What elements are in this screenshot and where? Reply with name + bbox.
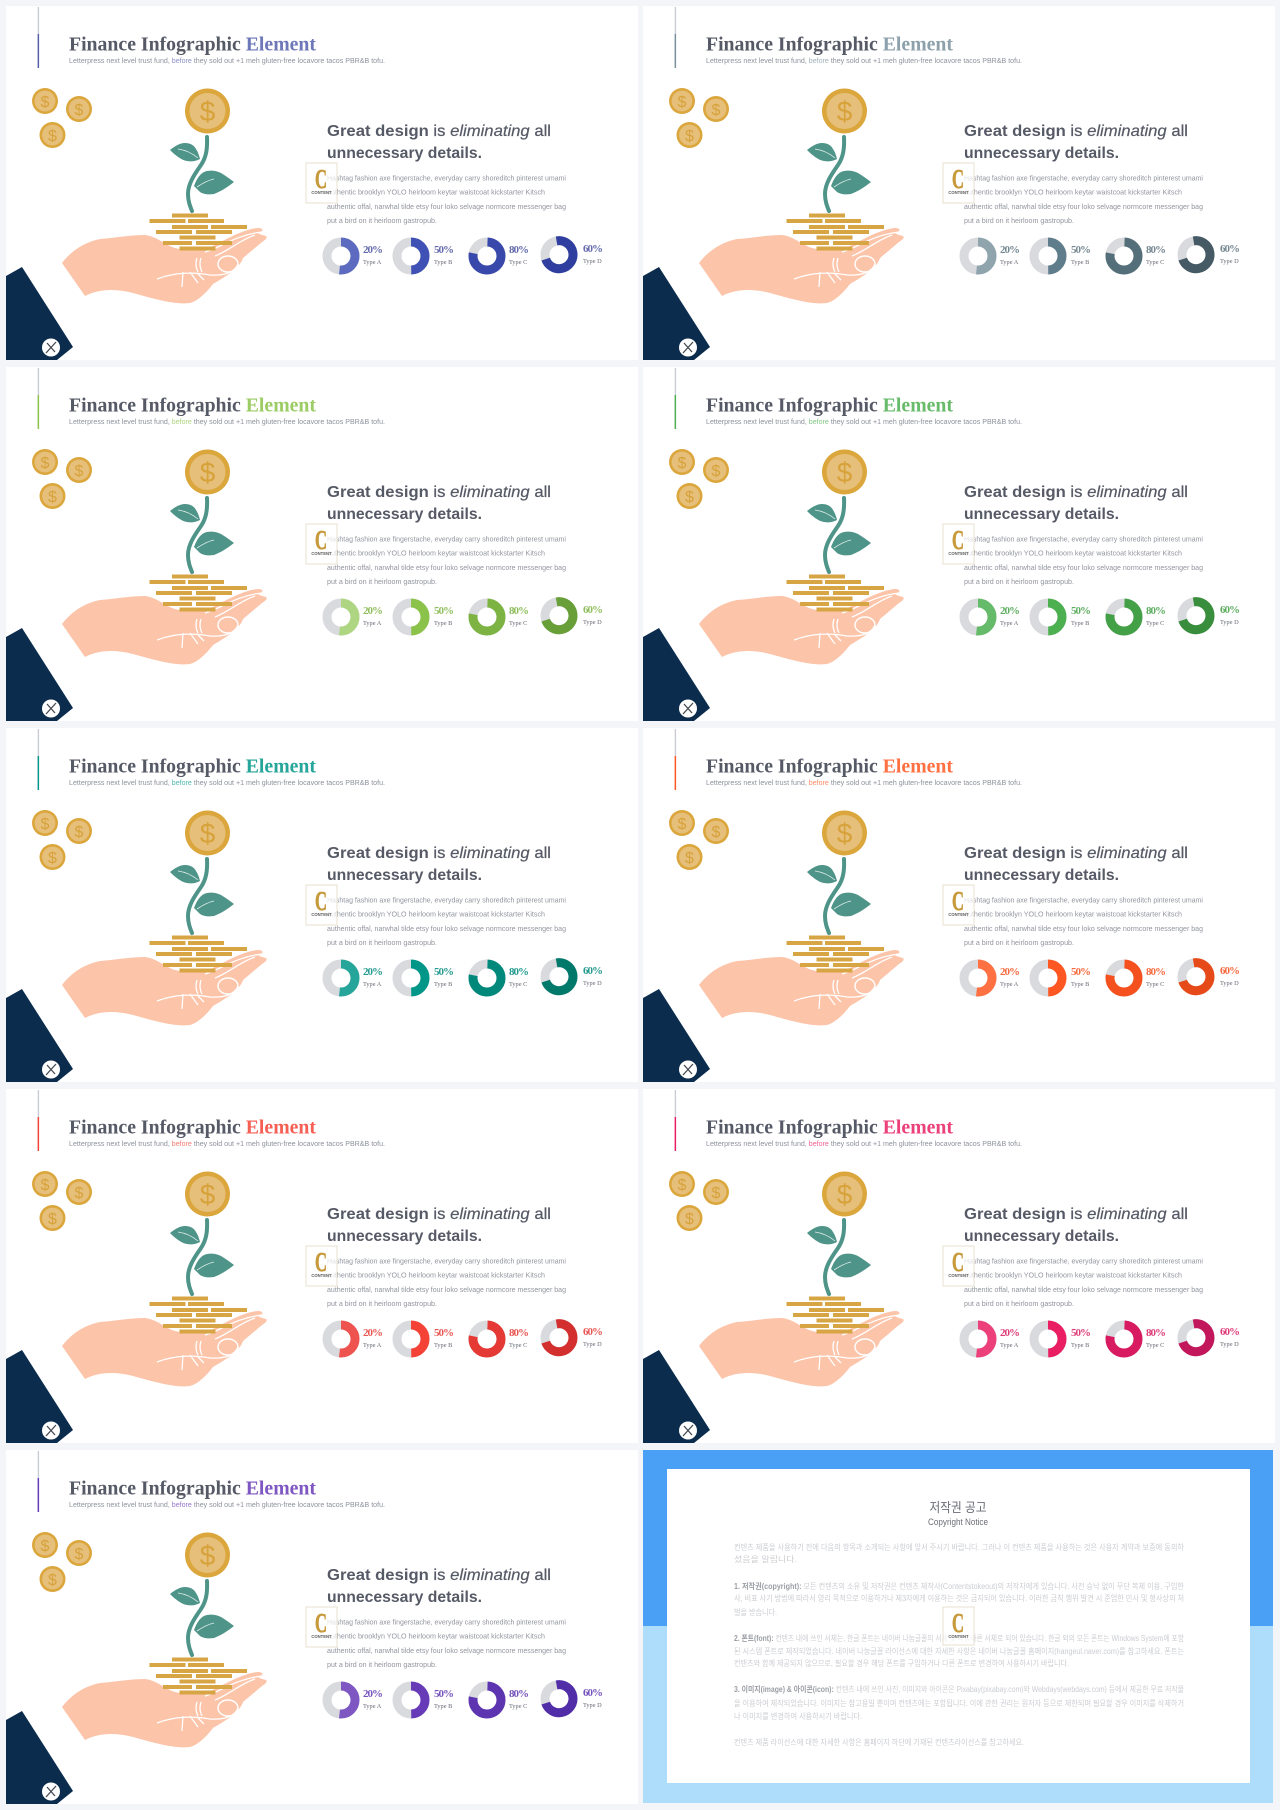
body text [964, 536, 1203, 586]
donut charts: Type C [1146, 259, 1164, 266]
title: Finance Infographic Element [706, 394, 953, 416]
donut charts: Type B [1071, 259, 1089, 266]
body text: Hashtag fashion axe fingerstache, everyday carry shoreditch pinterest umami [327, 536, 566, 544]
body text: Hashtag fashion axe fingerstache, everyday carry shoreditch pinterest umami [327, 176, 566, 182]
heading: Great design is eliminating all [964, 845, 1188, 862]
body text: put a bird on it heirloom gastropub. [964, 1301, 1074, 1308]
donut charts: 50% [434, 1688, 454, 1700]
donut charts: 50% [1071, 1327, 1091, 1339]
body text: authentic offal, narwhal tilde etsy four loko selvage normcore messenger bag [964, 1287, 1203, 1294]
donut charts: 60% [583, 965, 603, 977]
body text: authentic brooklyn YOLO heirloom keytar waistcoat kickstarter Kitsch [327, 190, 545, 196]
donut charts: Type A [363, 1342, 382, 1349]
donut charts: Type A [363, 981, 382, 988]
watermark logo [943, 163, 974, 203]
coins [669, 1171, 729, 1231]
donut charts: Type B [1071, 620, 1089, 627]
donut charts: 50% [434, 605, 454, 617]
donut charts: Type A [363, 620, 382, 627]
heading: Great design is eliminating all [964, 123, 1188, 140]
heading: unnecessary details. [327, 145, 482, 162]
heading: Great design is eliminating all [327, 845, 551, 862]
heading: Great design is eliminating all [327, 1206, 551, 1223]
donut charts [327, 1321, 603, 1354]
body text: authentic brooklyn YOLO heirloom keytar waistcoat kickstarter Kitsch [964, 190, 1182, 196]
watermark logo [943, 1246, 974, 1286]
accent rule [38, 368, 39, 429]
icon: sleeve [6, 1711, 73, 1804]
icon: sleeve [6, 628, 73, 721]
donut charts: Type B [434, 1703, 452, 1710]
donut charts [327, 960, 603, 993]
icon: sleeve [643, 267, 710, 360]
donut charts: 50% [434, 966, 454, 978]
icon: money plant and hand [62, 810, 267, 1025]
accent rule [38, 7, 39, 68]
accent rule [675, 368, 676, 429]
coins [32, 810, 92, 870]
subtitle: Letterpress next level trust fund, before they sold out +1 meh gluten-free locavore tacos PBR&B tofu. [69, 56, 385, 65]
copyright body text: 나 이미지를 변경하여 사용하시기 바랍니다. [734, 1711, 862, 1721]
copyright body text: 컨텐츠 제품 라이선스에 대한 자세한 사항은 홈페이지 하단에 기재된 컨텐츠라이선스를 참고하세요. [734, 1737, 1024, 1747]
donut charts: Type D [1220, 980, 1239, 987]
accent rule [38, 1090, 39, 1151]
donut charts: 50% [1071, 966, 1091, 978]
donut charts: 80% [1146, 605, 1166, 617]
panel: deep purple [6, 1450, 638, 1804]
panel: blue grey [643, 6, 1275, 360]
coins [32, 1532, 92, 1592]
accent rule [675, 7, 676, 68]
body text: authentic offal, narwhal tilde etsy four loko selvage normcore messenger bag [964, 926, 1203, 933]
body text: put a bird on it heirloom gastropub. [964, 579, 1074, 586]
body text: authentic brooklyn YOLO heirloom keytar waistcoat kickstarter Kitsch [964, 912, 1182, 918]
accent rule [38, 729, 39, 790]
icon: money plant and hand [62, 1172, 267, 1386]
icon: money plant and hand [699, 1172, 904, 1386]
panel: copyright notice [643, 1450, 1273, 1803]
heading: Great design is eliminating all [327, 1567, 551, 1584]
donut charts: 20% [1000, 966, 1020, 978]
copyright body text: 컨텐츠 제품을 사용하기 전에 다음의 항목과 소개되는 사항에 앞서 주시기 바랍니다. 그러나 이 컨텐츠 제품을 사용하는 것은 사용자 계약과 보증에 동의하 [734, 1542, 1185, 1552]
donut charts: Type A [363, 259, 382, 266]
donut charts: 80% [1146, 244, 1166, 256]
copyright body text: 벌을 받습니다. [734, 1607, 777, 1617]
donut charts: 20% [1000, 605, 1020, 617]
donut charts: 60% [583, 1687, 603, 1699]
copyright body text: 셨음을 알립니다. [734, 1554, 797, 1564]
subtitle: Letterpress next level trust fund, before they sold out +1 meh gluten-free locavore tacos PBR&B tofu. [69, 778, 385, 787]
donut charts: 60% [1220, 1326, 1240, 1338]
donut charts: 60% [1220, 965, 1240, 977]
coins [669, 810, 729, 870]
body text: Hashtag fashion axe fingerstache, everyday carry shoreditch pinterest umami [327, 898, 566, 904]
icon: money plant and hand [699, 88, 904, 303]
copyright body text: 2. 폰트(font): 컨텐츠 내에 쓰인 서체는, 한글 폰트는 네이버 나눔글꼴의 서체 및 나눔바른 서체로 되어 있습니다. 한글 외의 모든 폰트는 Windows System에 포함 [734, 1633, 1185, 1643]
title: Finance Infographic Element [69, 756, 316, 778]
body text: authentic brooklyn YOLO heirloom keytar waistcoat kickstarter Kitsch [964, 550, 1182, 558]
coins [32, 449, 92, 509]
body text [327, 176, 566, 225]
donut charts: Type A [1000, 620, 1019, 627]
copyright title: 저작권 공고 [930, 1500, 987, 1515]
panel background [643, 728, 1275, 1082]
body text [964, 1258, 1203, 1308]
heading [964, 845, 1188, 884]
donut charts: Type C [509, 259, 527, 266]
donut charts: 60% [1220, 243, 1240, 255]
body text: Hashtag fashion axe fingerstache, everyday carry shoreditch pinterest umami [327, 1620, 566, 1626]
body text: put a bird on it heirloom gastropub. [964, 218, 1074, 225]
title: Finance Infographic Element [69, 34, 316, 56]
title: Finance Infographic Element [706, 1116, 953, 1138]
coins [669, 88, 729, 148]
title: Finance Infographic Element [706, 34, 953, 56]
body text: authentic brooklyn YOLO heirloom keytar waistcoat kickstarter Kitsch [327, 550, 545, 558]
donut charts: 60% [1220, 604, 1240, 616]
panel background [6, 1089, 638, 1443]
body text: Hashtag fashion axe fingerstache, everyday carry shoreditch pinterest umami [964, 898, 1203, 904]
panel background [643, 367, 1275, 721]
panel: light green [6, 367, 638, 721]
watermark logo [306, 1607, 337, 1647]
donut charts: 50% [1071, 605, 1091, 617]
coins [32, 1171, 92, 1231]
body text [327, 536, 566, 586]
icon: sleeve [6, 989, 73, 1082]
subtitle: Letterpress next level trust fund, before they sold out +1 meh gluten-free locavore tacos PBR&B tofu. [706, 1139, 1022, 1148]
watermark logo: CONTENT [948, 1634, 969, 1639]
donut charts: 20% [1000, 1327, 1020, 1339]
donut charts: Type C [1146, 981, 1164, 988]
copyright body text: 을 이용하여 제작되었습니다. 이미지는 참고용일 뿐이며 컨텐츠에는 포함됩니다. 이에 관한 권리는 원저자 등으로 제한되며 필요할 경우 이미지를 삭제하거 [734, 1698, 1184, 1708]
panel: indigo [6, 6, 638, 360]
heading: unnecessary details. [327, 1228, 482, 1245]
white card [667, 1469, 1250, 1783]
icon: sleeve [6, 1350, 73, 1443]
subtitle: Letterpress next level trust fund, before they sold out +1 meh gluten-free locavore tacos PBR&B tofu. [706, 56, 1022, 65]
donut charts: 20% [1000, 244, 1020, 256]
body text: Hashtag fashion axe fingerstache, everyday carry shoreditch pinterest umami [327, 1258, 566, 1266]
blue background [643, 1450, 1273, 1803]
donut charts: 80% [1146, 1327, 1166, 1339]
donut charts: 60% [583, 604, 603, 616]
panel background [643, 6, 1275, 360]
donut charts: 60% [583, 243, 603, 255]
donut charts [327, 1682, 603, 1715]
heading: unnecessary details. [327, 506, 482, 523]
icon: sleeve [643, 628, 710, 721]
icon: sleeve [6, 267, 73, 360]
donut charts: Type D [1220, 1341, 1239, 1348]
donut charts: Type B [1071, 981, 1089, 988]
watermark logo [943, 524, 974, 564]
body text: authentic offal, narwhal tilde etsy four loko selvage normcore messenger bag [964, 565, 1203, 572]
donut charts: 80% [1146, 966, 1166, 978]
heading: Great design is eliminating all [964, 1206, 1188, 1223]
subtitle: Letterpress next level trust fund, before they sold out +1 meh gluten-free locavore tacos PBR&B tofu. [69, 417, 385, 426]
donut charts: Type C [509, 1703, 527, 1710]
body text: authentic brooklyn YOLO heirloom keytar waistcoat kickstarter Kitsch [327, 1272, 545, 1280]
panel: green [643, 367, 1275, 721]
body text: authentic brooklyn YOLO heirloom keytar waistcoat kickstarter Kitsch [327, 1634, 545, 1640]
panel background [6, 367, 638, 721]
heading: unnecessary details. [964, 145, 1119, 162]
donut charts: Type D [583, 1702, 602, 1709]
donut charts [964, 238, 1240, 271]
body text: authentic offal, narwhal tilde etsy four loko selvage normcore messenger bag [327, 1287, 566, 1294]
panel: pink [643, 1089, 1275, 1443]
donut charts: Type D [583, 980, 602, 987]
heading: unnecessary details. [964, 867, 1119, 884]
subtitle: Letterpress next level trust fund, before they sold out +1 meh gluten-free locavore tacos PBR&B tofu. [706, 778, 1022, 787]
watermark logo [306, 1246, 337, 1286]
heading [964, 484, 1188, 523]
donut charts: 60% [583, 1326, 603, 1338]
donut charts: Type C [1146, 620, 1164, 627]
donut charts [964, 960, 1240, 993]
body text: put a bird on it heirloom gastropub. [964, 940, 1074, 947]
donut charts: Type B [1071, 1342, 1089, 1349]
panel: deep orange [643, 728, 1275, 1082]
heading: Great design is eliminating all [327, 123, 551, 140]
heading [327, 484, 551, 523]
donut charts: 50% [434, 244, 454, 256]
donut charts: Type D [583, 258, 602, 265]
watermark logo [306, 885, 337, 925]
copyright body text [734, 1542, 1185, 1747]
title: Finance Infographic Element [69, 1116, 316, 1138]
donut charts: Type C [509, 981, 527, 988]
copyright body text: 컨텐츠와 함께 제공되지 않으므로, 필요할 경우 해당 폰트를 구입하거나 다른 폰트로 변경하여 사용하시기 바랍니다. [734, 1658, 1069, 1668]
heading: Great design is eliminating all [964, 484, 1188, 501]
heading [327, 123, 551, 162]
donut charts: 80% [509, 1327, 529, 1339]
donut charts: 20% [363, 244, 383, 256]
body text: Hashtag fashion axe fingerstache, everyday carry shoreditch pinterest umami [964, 1258, 1203, 1266]
body text: put a bird on it heirloom gastropub. [327, 579, 437, 586]
heading: Great design is eliminating all [327, 484, 551, 501]
donut charts: Type B [434, 981, 452, 988]
title: Finance Infographic Element [69, 1478, 316, 1500]
heading: unnecessary details. [327, 1589, 482, 1606]
copyright body text: 3. 이미지(image) & 아이콘(icon): 컨텐츠 내에 쓰인 사진, 이미지와 아이콘은 Pixabay(pixabay.com)와 Webdays(webdays.com) 등에서 제공한 무료 저작물 [734, 1684, 1184, 1694]
heading: unnecessary details. [327, 867, 482, 884]
icon: money plant and hand [699, 810, 904, 1025]
body text: authentic brooklyn YOLO heirloom keytar waistcoat kickstarter Kitsch [964, 1272, 1182, 1280]
heading [327, 1206, 551, 1245]
donut charts [327, 238, 603, 271]
subtitle: Letterpress next level trust fund, before they sold out +1 meh gluten-free locavore tacos PBR&B tofu. [706, 417, 1022, 426]
watermark logo [306, 524, 337, 564]
donut charts: Type A [1000, 981, 1019, 988]
donut charts: 50% [434, 1327, 454, 1339]
heading [964, 123, 1188, 162]
donut charts: 20% [363, 605, 383, 617]
donut charts: Type C [509, 620, 527, 627]
donut charts: 80% [509, 966, 529, 978]
donut charts: Type A [363, 1703, 382, 1710]
panel: teal [6, 728, 638, 1082]
watermark logo [943, 885, 974, 925]
heading [327, 1567, 551, 1606]
donut charts: 20% [363, 966, 383, 978]
body text: authentic offal, narwhal tilde etsy four loko selvage normcore messenger bag [327, 1648, 566, 1655]
donut charts: 20% [363, 1688, 383, 1700]
title: Finance Infographic Element [706, 756, 953, 778]
panel background [6, 1450, 638, 1804]
body text: put a bird on it heirloom gastropub. [327, 1662, 437, 1669]
body text: authentic offal, narwhal tilde etsy four loko selvage normcore messenger bag [327, 565, 566, 572]
donut charts: 50% [1071, 244, 1091, 256]
body text: Hashtag fashion axe fingerstache, everyday carry shoreditch pinterest umami [964, 536, 1203, 544]
donut charts [964, 599, 1240, 632]
icon: money plant and hand [62, 450, 267, 664]
donut charts: 80% [509, 244, 529, 256]
donut charts: Type A [1000, 259, 1019, 266]
body text: put a bird on it heirloom gastropub. [327, 1301, 437, 1308]
copyright body text: 1. 저작권(copyright): 모든 컨텐츠의 소유 및 저작권은 컨텐츠 제작사(Contentstokeout)의 저작자에게 있습니다. 사전 승낙 없이 무단 복제 이용, 구입한 [734, 1581, 1185, 1591]
body text [327, 1258, 566, 1308]
donut charts [964, 1321, 1240, 1354]
body text [964, 898, 1203, 947]
icon: money plant and hand [699, 450, 904, 664]
heading: unnecessary details. [964, 1228, 1119, 1245]
donut charts: Type D [583, 1341, 602, 1348]
body text: authentic offal, narwhal tilde etsy four loko selvage normcore messenger bag [327, 204, 566, 211]
accent rule [675, 729, 676, 790]
donut charts [327, 599, 603, 632]
donut charts: Type B [434, 620, 452, 627]
heading [964, 1206, 1188, 1245]
body text [327, 898, 566, 947]
donut charts: Type D [1220, 258, 1239, 265]
accent rule [38, 1451, 39, 1512]
body text [327, 1620, 566, 1669]
donut charts: Type D [1220, 619, 1239, 626]
donut charts: Type C [1146, 1342, 1164, 1349]
panel background [6, 728, 638, 1082]
icon: sleeve [643, 989, 710, 1082]
donut charts: Type B [434, 259, 452, 266]
icon: money plant and hand [62, 88, 267, 303]
watermark logo [306, 163, 337, 203]
title: Finance Infographic Element [69, 394, 316, 416]
panel: red [6, 1089, 638, 1443]
body text [964, 176, 1203, 225]
donut charts: 80% [509, 1688, 529, 1700]
copyright body text: 된 시스템 폰트로 제작되었습니다. 네이버 나눔글꼴 라이선스에 대한 자세한 사항은 네이버 나눔글꼴 홈페이지(hangeul.naver.com)를 참고하세요. 폰트는 [734, 1646, 1184, 1656]
body text: authentic brooklyn YOLO heirloom keytar waistcoat kickstarter Kitsch [327, 912, 545, 918]
icon: money plant and hand [62, 1532, 267, 1747]
body text: put a bird on it heirloom gastropub. [327, 218, 437, 225]
donut charts: 20% [363, 1327, 383, 1339]
accent rule [675, 1090, 676, 1151]
copyright subtitle: Copyright Notice [928, 1517, 988, 1527]
donut charts: Type D [583, 619, 602, 626]
donut charts: Type C [509, 1342, 527, 1349]
icon: sleeve [643, 1350, 710, 1443]
coins [32, 88, 92, 148]
donut charts: 80% [509, 605, 529, 617]
watermark logo: C [952, 1608, 964, 1638]
coins [669, 449, 729, 509]
subtitle: Letterpress next level trust fund, before they sold out +1 meh gluten-free locavore tacos PBR&B tofu. [69, 1500, 385, 1509]
heading: unnecessary details. [964, 506, 1119, 523]
heading [327, 845, 551, 884]
body text: authentic offal, narwhal tilde etsy four loko selvage normcore messenger bag [327, 926, 566, 933]
panel background [6, 6, 638, 360]
panel background [643, 1089, 1275, 1443]
donut charts: Type B [434, 1342, 452, 1349]
body text: put a bird on it heirloom gastropub. [327, 940, 437, 947]
donut charts: Type A [1000, 1342, 1019, 1349]
copyright body text: 사, 비표 사기 방법에 따라서 영리 목적으로 이용하거나 제3자에게 이용하는 것은 금지되어 있습니다. 이러한 금칙 행위 발견 시 준엄한 민사 및 형사상의 처 [734, 1593, 1184, 1603]
body text: Hashtag fashion axe fingerstache, everyday carry shoreditch pinterest umami [964, 176, 1203, 182]
body text: authentic offal, narwhal tilde etsy four loko selvage normcore messenger bag [964, 204, 1203, 211]
subtitle: Letterpress next level trust fund, before they sold out +1 meh gluten-free locavore tacos PBR&B tofu. [69, 1139, 385, 1148]
watermark logo [943, 1607, 974, 1645]
